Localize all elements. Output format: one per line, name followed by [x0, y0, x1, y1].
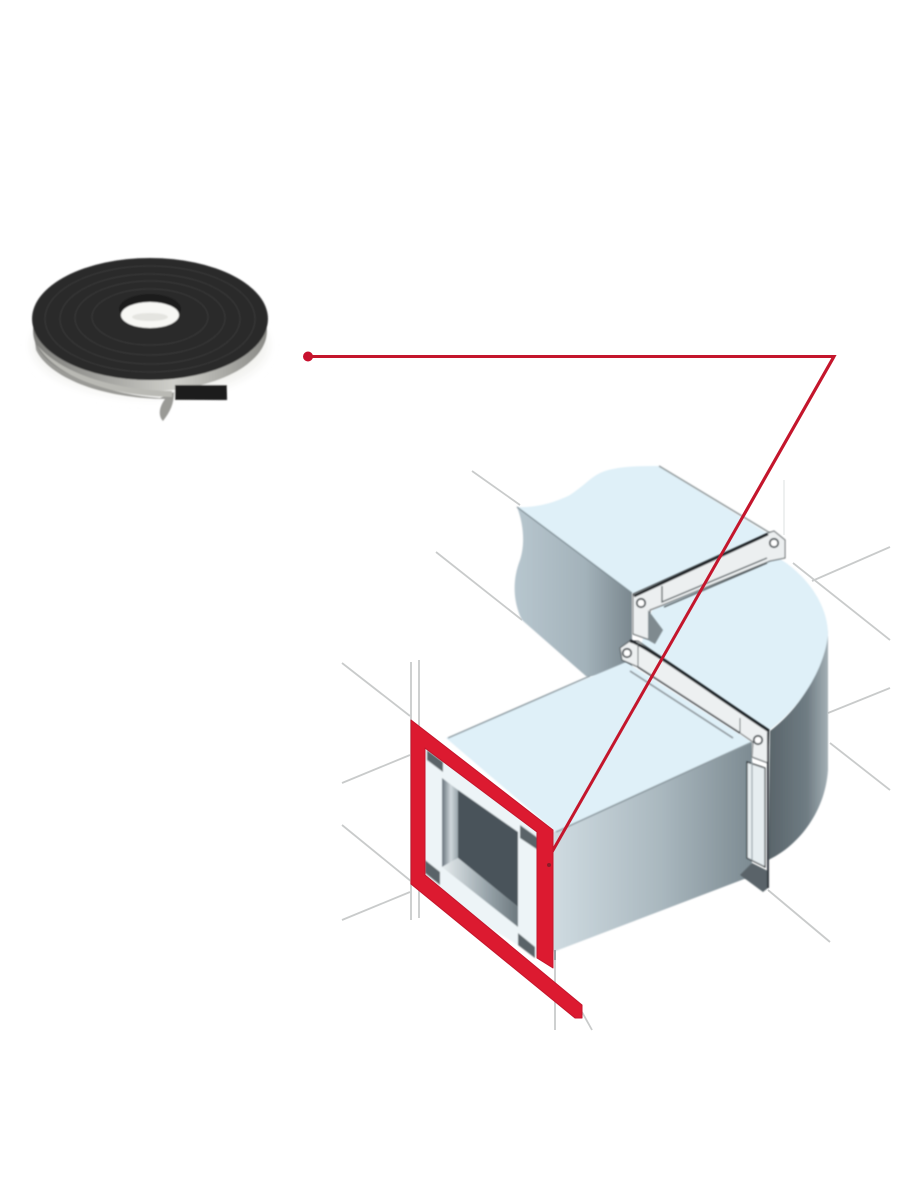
flange: upper joint [633, 531, 785, 644]
duct: front straight section [446, 662, 752, 952]
flange: lower joint [620, 641, 769, 892]
leader line: red callout from tape to duct flange [303, 352, 834, 852]
duct construction lines [342, 471, 890, 1030]
duct: upper straight section [515, 466, 770, 677]
duct edge below flange [554, 950, 556, 960]
leader line: red segment crossing the duct [552, 356, 834, 852]
duct opening with flange and corners [412, 722, 552, 966]
duct: curved elbow section [640, 554, 828, 860]
red sealing tape on the duct flange [411, 720, 582, 1018]
icon: roll of black sealing tape [32, 258, 268, 421]
